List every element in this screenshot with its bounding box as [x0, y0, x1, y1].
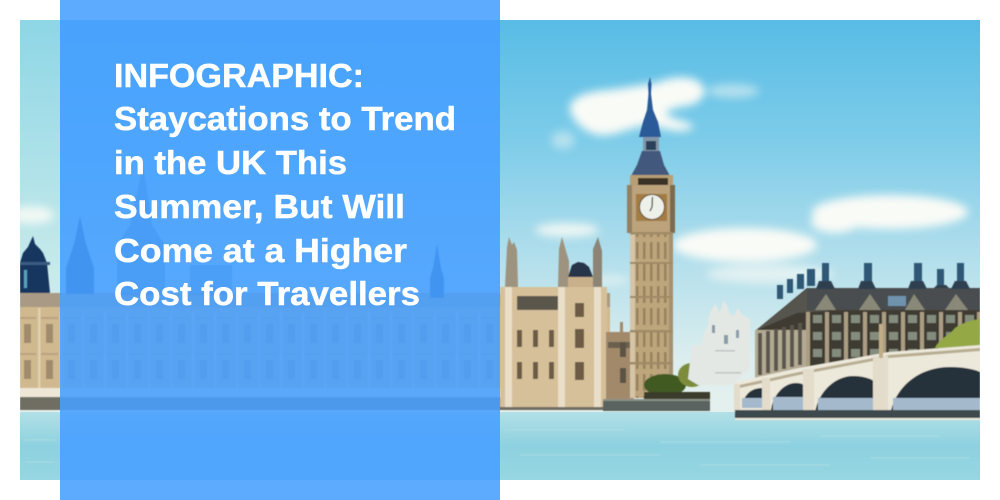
icon: clock face — [640, 194, 664, 220]
belfry — [629, 174, 674, 186]
title: in the UK This — [114, 144, 347, 181]
spire — [639, 77, 661, 137]
title panel — [60, 0, 500, 500]
far-left tower — [20, 236, 50, 293]
Portcullis House — [755, 263, 980, 378]
chimneys — [777, 263, 964, 299]
Westminster Bridge — [734, 324, 980, 420]
clock stage — [631, 188, 670, 233]
roof — [631, 151, 670, 176]
Palace of Westminster: long facade — [20, 293, 610, 410]
trees and embankment — [603, 363, 710, 411]
title — [114, 57, 456, 312]
Big Ben clock tower — [627, 77, 675, 398]
piers — [734, 356, 888, 418]
tree behind the bridge — [935, 319, 980, 348]
title: Staycations to Trend — [114, 100, 456, 137]
roof dormers — [815, 294, 968, 310]
left-hand parliament towers — [66, 165, 444, 298]
east gothic block — [500, 237, 607, 407]
shaft — [630, 233, 673, 398]
sky — [20, 20, 980, 420]
arches — [742, 367, 980, 416]
title: Cost for Travellers — [114, 275, 420, 312]
river ripples — [25, 430, 970, 465]
title: Come at a Higher — [114, 232, 407, 269]
low block by the clock tower — [606, 322, 634, 400]
white Whitehall building — [688, 300, 750, 385]
title: Summer, But Will — [114, 188, 405, 225]
title: INFOGRAPHIC: — [114, 57, 364, 94]
clouds — [10, 77, 968, 285]
water — [20, 412, 980, 480]
